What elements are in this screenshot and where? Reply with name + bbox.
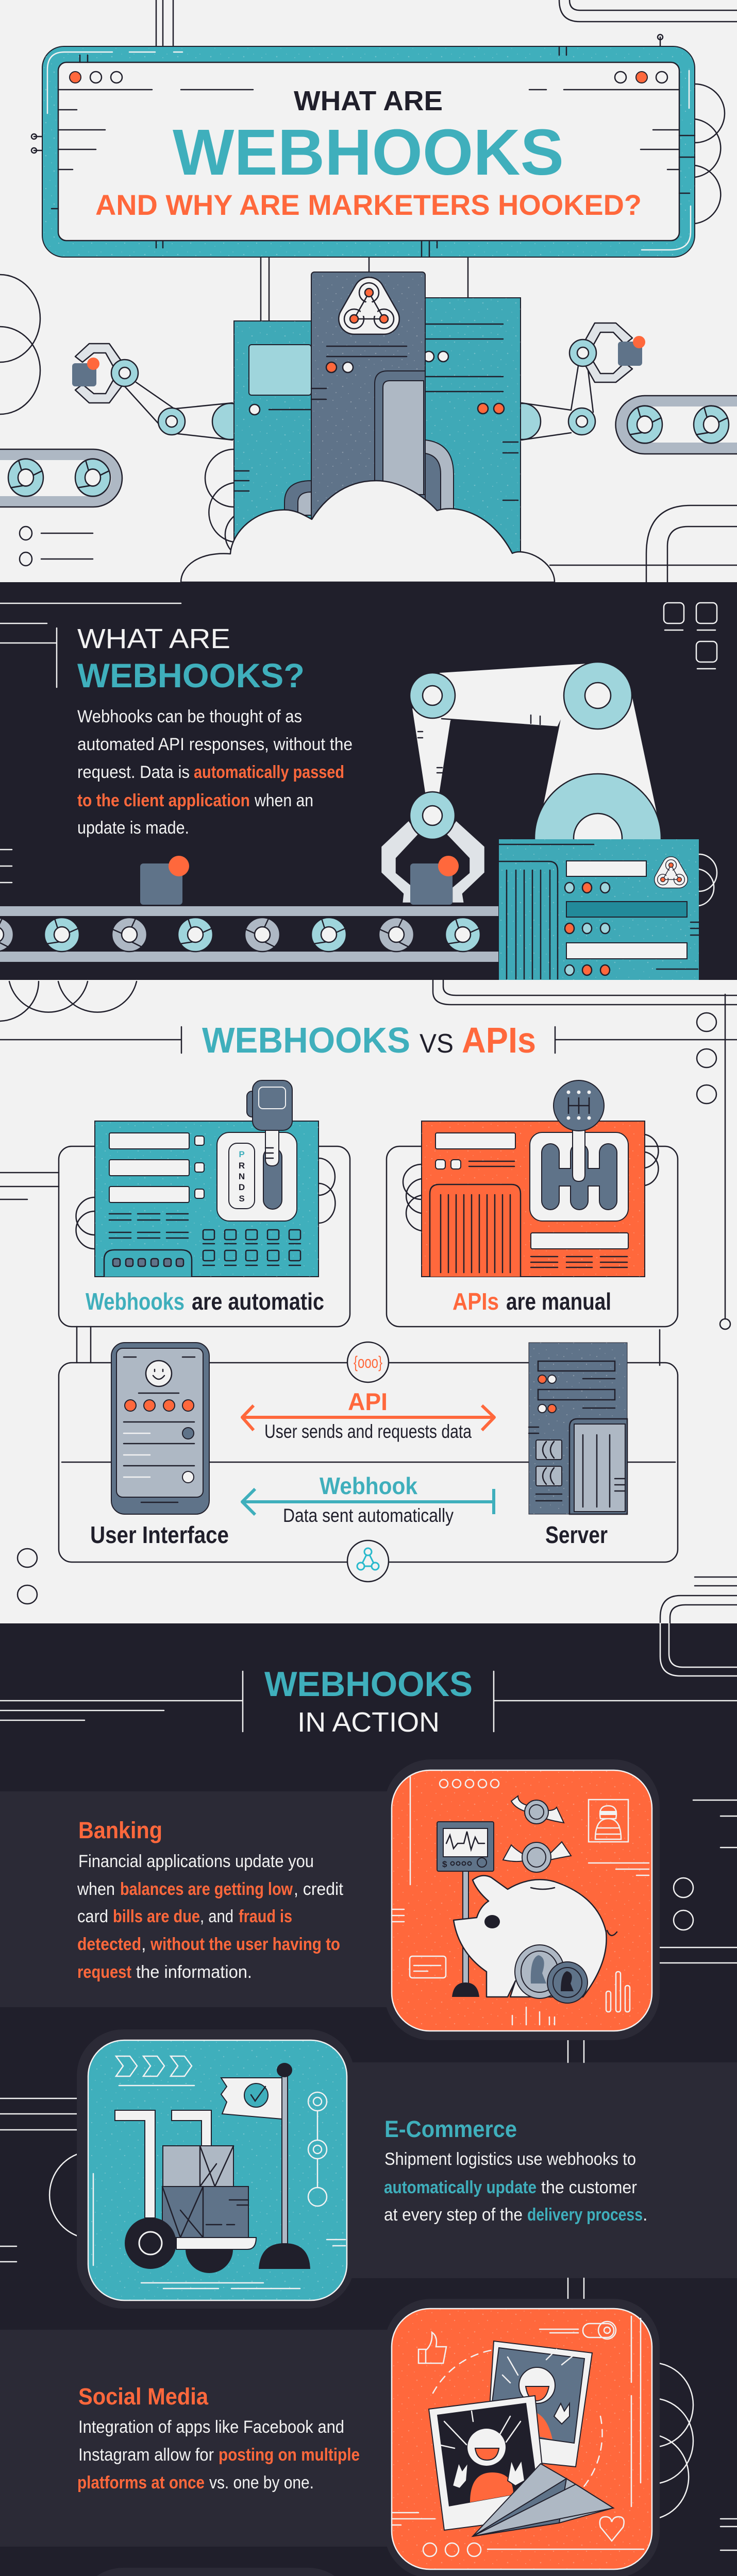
card: e-commerce illustration [77, 2029, 355, 2309]
gear letters: R [239, 1161, 245, 1171]
text block: banking: without the user having to [150, 1935, 340, 1954]
text block: banking: , credit [294, 1879, 344, 1899]
text block: banking: the information. [136, 1962, 252, 1982]
card: banking illustration [384, 1759, 660, 2040]
label: webhooks are automatic [86, 1288, 324, 1315]
heading: webhooks in action: IN ACTION [297, 1707, 440, 1738]
conveyor: left [0, 449, 122, 507]
text block: social media: posting on multiple [219, 2445, 360, 2465]
text block: e-commerce: automatically update [384, 2178, 537, 2197]
decorative line work on dark section [0, 1623, 737, 2576]
text block: banking: bills are due [113, 1907, 200, 1926]
machine: centre slate tower [311, 272, 425, 530]
text block: banking: request [77, 1962, 131, 1982]
heading: webhooks in action: WEBHOOKS [264, 1665, 473, 1704]
panel: webhooks are automatic [59, 1080, 350, 1327]
heading: webhooks in action [264, 1665, 473, 1738]
panel: api vs webhook data flow [59, 1342, 678, 1582]
text block: banking: fraud is [239, 1907, 292, 1926]
arrow: two-way api [242, 1405, 494, 1430]
cloud [181, 481, 555, 582]
heading: what are: WHAT ARE [294, 86, 443, 116]
text block: e-commerce: . [643, 2205, 647, 2225]
monitor [437, 1822, 494, 1997]
text block: definition: to the client application [77, 791, 250, 810]
icon: server tower [529, 1343, 627, 1514]
robot arm: right [505, 323, 645, 440]
card decoration [392, 2316, 644, 2556]
title frame [42, 46, 695, 257]
gear letters: P [239, 1149, 245, 1159]
heading: webhooks vs apis [202, 1020, 536, 1060]
text block: definition: when an [254, 791, 313, 810]
heading: what are webhooks: WEBHOOKS? [77, 656, 305, 694]
label: webhook: Webhook [320, 1472, 417, 1499]
automatic machine [95, 1080, 319, 1277]
what are webhooks: decorative lines [0, 603, 717, 906]
text block: social media: vs. one by one. [209, 2473, 314, 2493]
text block: e-commerce [384, 2116, 647, 2225]
text block: definition: request. Data is [77, 762, 190, 782]
heading: webhooks vs apis: WEBHOOKS [202, 1020, 410, 1060]
manual machine [422, 1080, 645, 1277]
robot arm [381, 662, 663, 903]
icon: webhook circle [347, 1540, 389, 1582]
heading: webhooks vs apis: VS [420, 1029, 454, 1059]
dark section: what are webhooks [0, 582, 737, 980]
text block: social media [77, 2383, 360, 2493]
text block: definition: Webhooks can be thought of as [77, 707, 302, 726]
title panel [42, 46, 695, 257]
text block: definition [77, 707, 353, 838]
text block: banking: card [77, 1907, 108, 1926]
text block: banking: , [141, 1935, 146, 1954]
heading: and why are marketers hooked: AND WHY ARE MARKETERS HOOKED? [95, 189, 642, 221]
text block: social media: Integration of apps like Facebook and [78, 2417, 344, 2437]
text block: banking: Financial applications update you [78, 1852, 314, 1871]
label: user interface: User Interface [90, 1521, 229, 1548]
caption: data sent automatically: Data sent automatically [283, 1505, 454, 1526]
caption: user sends and requests data: User sends and requests data [264, 1421, 472, 1442]
label: webhooks are automatic: are automatic [192, 1288, 324, 1315]
monitor: $ [442, 1859, 447, 1869]
photo: front [429, 2396, 547, 2530]
text block: banking: when [77, 1879, 115, 1899]
control panel machine [499, 839, 699, 980]
piggy bank [454, 1875, 617, 2003]
label: apis are manual: are manual [506, 1288, 611, 1315]
card: social media illustration [384, 2299, 660, 2576]
gear letters [239, 1149, 245, 1204]
text block: banking: detected [77, 1935, 141, 1954]
icon: code braces circle [347, 1342, 389, 1382]
card decoration [392, 1777, 649, 2025]
gear letters: S [239, 1194, 245, 1204]
text block: e-commerce: at every step of the [384, 2205, 523, 2225]
text block: definition: update is made. [77, 818, 189, 838]
icon: webhook logo [344, 283, 394, 329]
text block: e-commerce: delivery process [527, 2205, 643, 2225]
row band: e-commerce [330, 2062, 737, 2278]
card decoration [93, 2056, 345, 2289]
arrow: one-way webhook [242, 1489, 494, 1515]
text block: banking: balances are getting low [120, 1879, 293, 1899]
icon: code braces circle: {ooo} [354, 1353, 382, 1371]
paper plane [473, 2464, 613, 2536]
heading: webhooks vs apis: APIs [462, 1020, 536, 1060]
heading: what are webhooks: WHAT ARE [77, 623, 230, 654]
row band: social media [0, 2330, 412, 2547]
panel: apis are manual [387, 1080, 678, 1327]
text block: social media: Instagram allow for [78, 2445, 214, 2465]
heading: webhooks: WEBHOOKS [173, 116, 564, 189]
card: investments illustration [77, 2568, 355, 2576]
label: webhooks are automatic: Webhooks [86, 1288, 185, 1315]
hand truck with boxes [115, 2110, 256, 2273]
icon: phone user interface [111, 1343, 209, 1514]
row band: banking [0, 1791, 412, 2007]
header illustration: machine with robot arms and conveyors [0, 272, 737, 582]
flag [221, 2063, 310, 2269]
text block: social media: Social Media [78, 2383, 209, 2410]
heading: what are webhooks [77, 623, 305, 694]
text block: definition: automated API responses, without the [77, 735, 353, 754]
text block: social media: platforms at once [77, 2473, 205, 2493]
text block: e-commerce: the customer [541, 2178, 637, 2197]
dark section: webhooks in action [0, 1623, 737, 2576]
text block: e-commerce: Shipment logistics use webhooks to [384, 2149, 636, 2169]
machine: left teal tower [234, 321, 311, 548]
flying coins [503, 1796, 571, 1872]
text block: definition: automatically passed [194, 762, 344, 782]
gear letters: D [239, 1182, 245, 1192]
text block: banking: Banking [78, 1817, 162, 1843]
robot arm: left [72, 344, 248, 440]
conveyor: right [615, 396, 737, 454]
text block: banking [77, 1817, 344, 1982]
label: apis are manual: APIs [453, 1288, 499, 1315]
label: server: Server [545, 1521, 608, 1548]
photo: back [487, 2341, 592, 2467]
gear letters: N [239, 1172, 245, 1181]
label: apis are manual [453, 1288, 611, 1315]
conveyor belt with boxes [0, 856, 498, 962]
text block: e-commerce: E-Commerce [384, 2116, 517, 2142]
label: api: API [348, 1388, 388, 1415]
text block: banking: , and [200, 1907, 233, 1926]
machine: right teal tower [424, 298, 521, 555]
